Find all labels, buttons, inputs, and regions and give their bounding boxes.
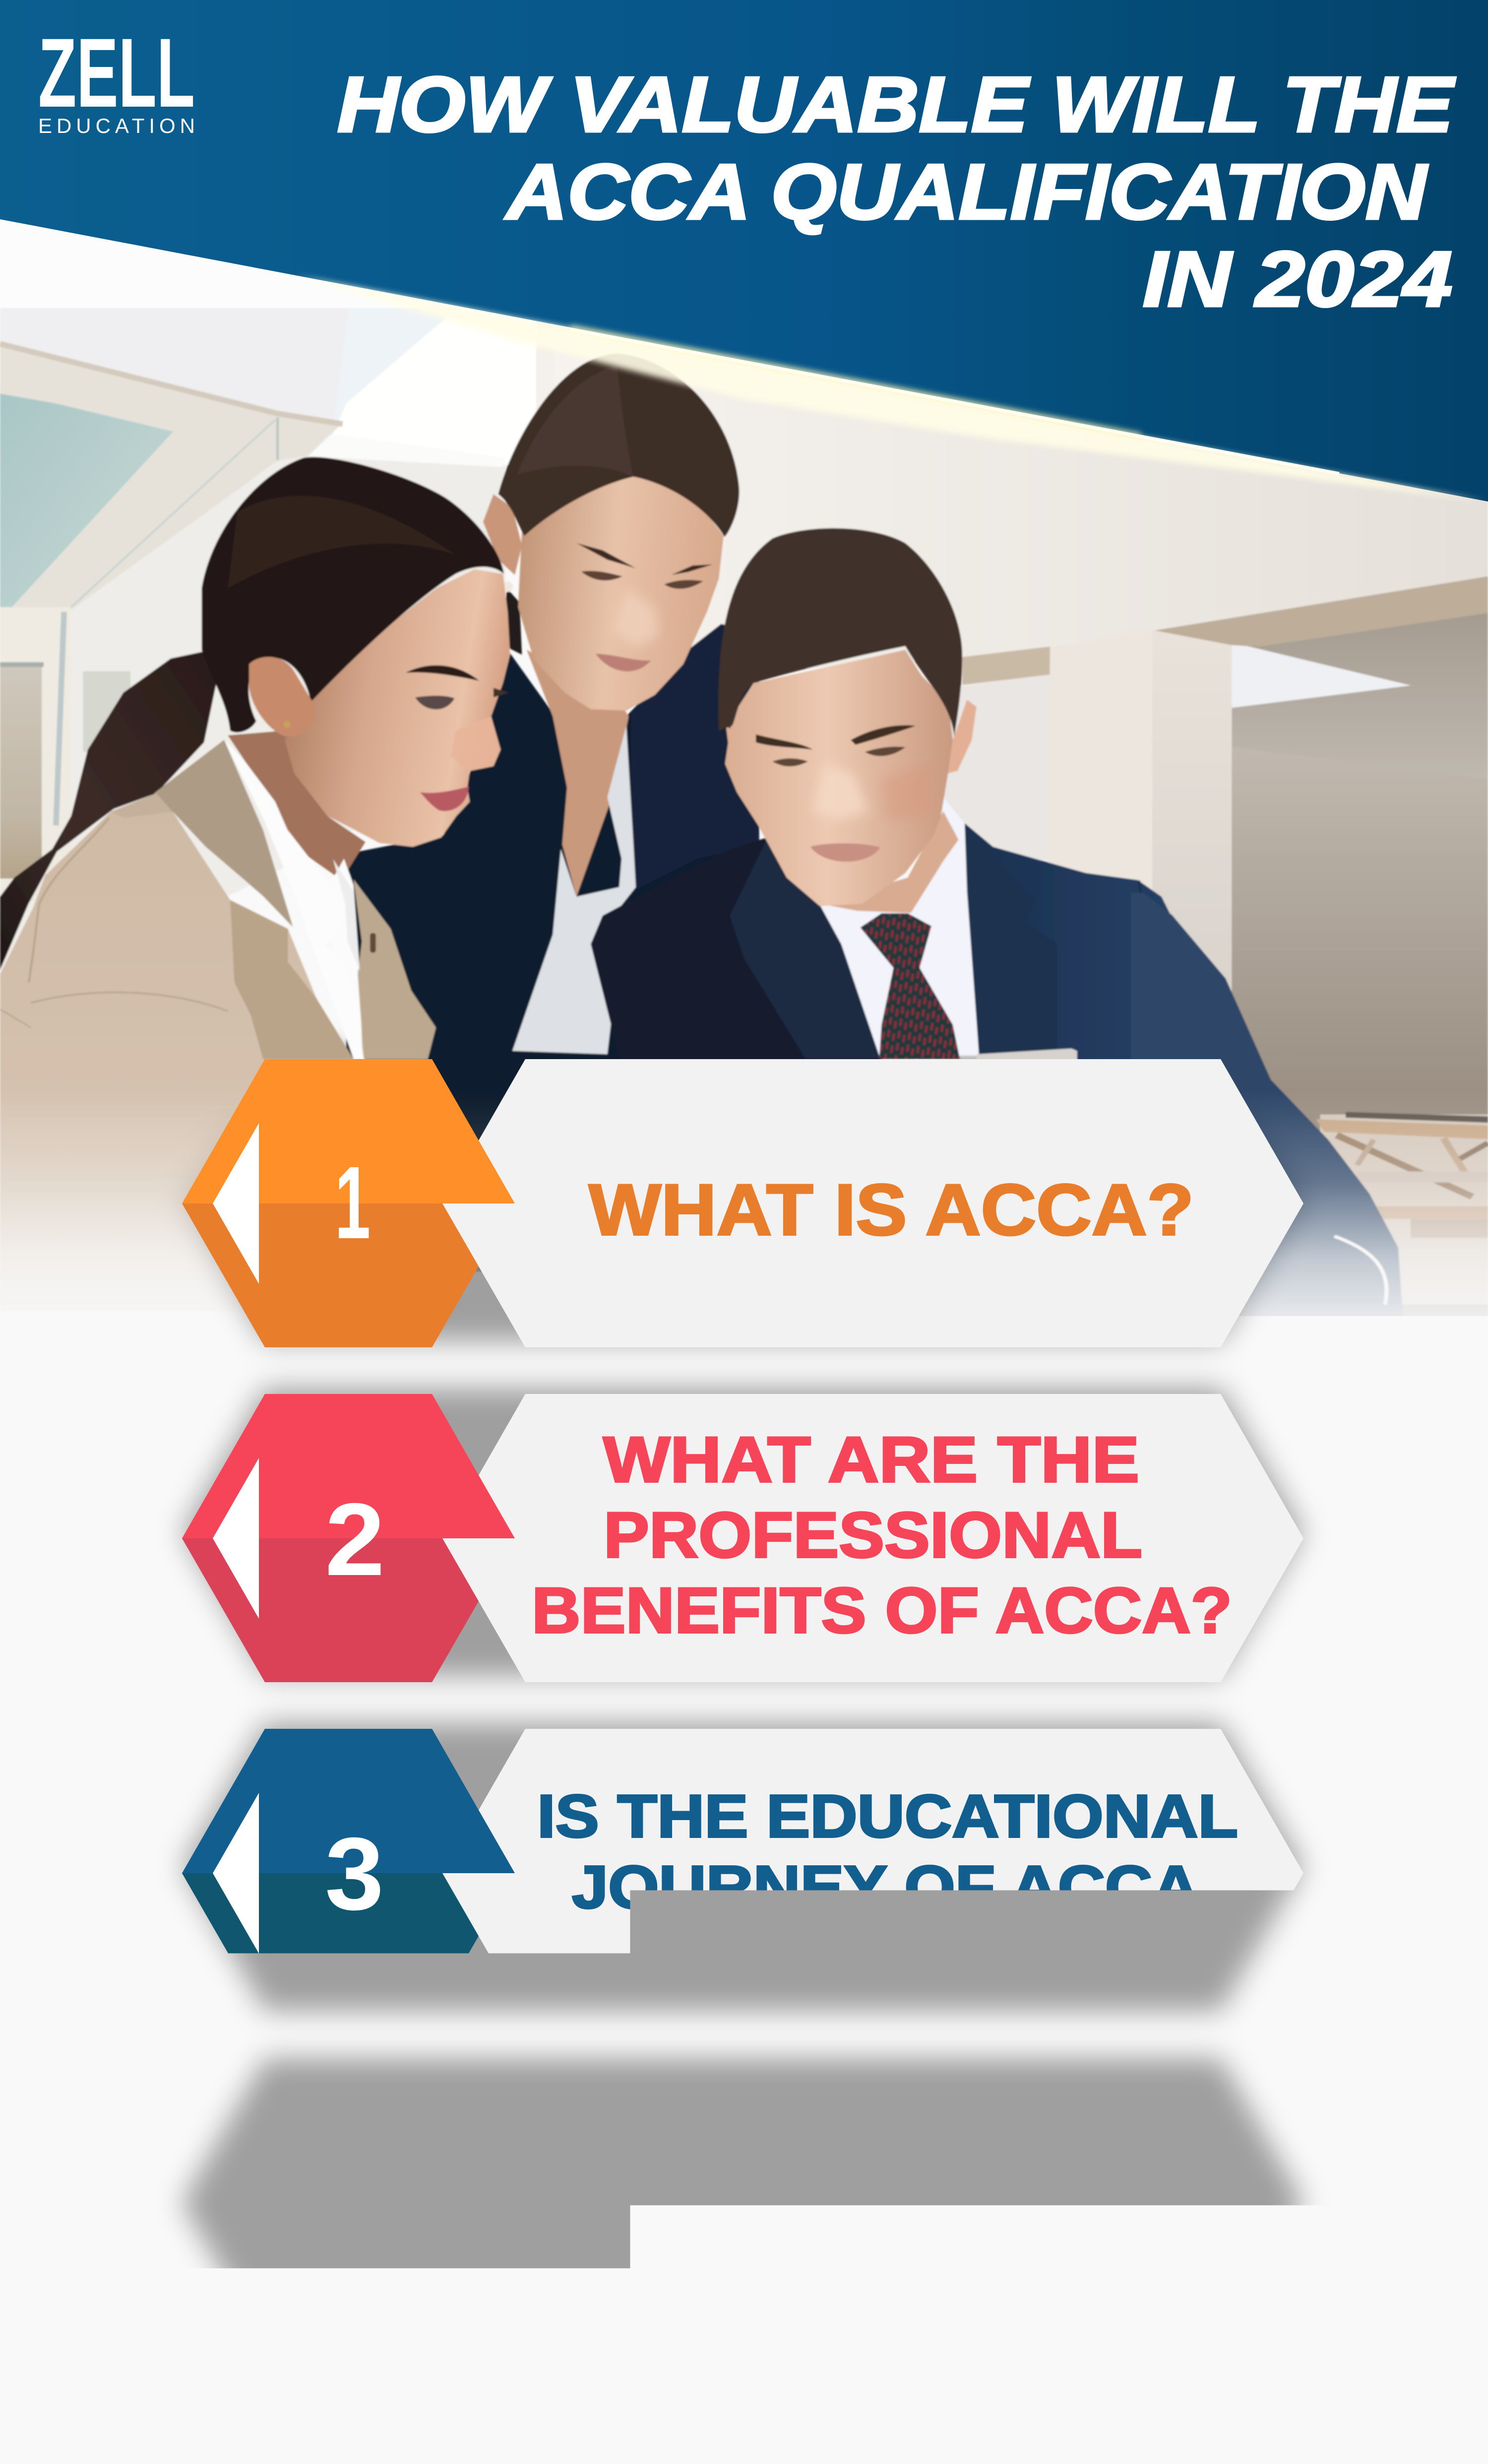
tie: [860, 913, 960, 1059]
hexagon upper half: [182, 1729, 515, 1873]
man's right arm: [1131, 893, 1403, 1317]
building background left: [0, 308, 759, 987]
white arrow: [213, 1123, 259, 1284]
hair: [202, 457, 504, 732]
suit lapel: [965, 825, 1057, 1067]
hexagon lower half: [182, 2209, 515, 2352]
row 1: what is ACCA: [182, 1059, 1303, 1347]
label panel: [442, 2064, 1303, 2352]
hexagon upper half: [182, 1394, 515, 1538]
label: [532, 1423, 1232, 1646]
blazer: [346, 624, 759, 1271]
logo: Zell Education: EDUCATION: [38, 114, 195, 137]
brows, eyes, nose, lips: [756, 734, 813, 750]
title: ACCA QUALIFICATION: [504, 148, 1428, 236]
label panel: [442, 1394, 1303, 1682]
earring: [502, 581, 513, 592]
number: 2: [325, 1482, 385, 1597]
coat collar: [154, 740, 293, 927]
label: IS THE EDUCATIONAL: [537, 1782, 1238, 1850]
hexagon upper half: [182, 1059, 515, 1203]
neck: [228, 731, 366, 880]
label panel: [442, 1729, 1303, 2017]
earring: [284, 721, 290, 728]
white shirt: [512, 726, 636, 1054]
logo: Zell Education: [38, 18, 195, 137]
photo: three colleagues looking at a tablet: [0, 280, 1488, 1319]
title: [337, 61, 1456, 323]
row 4: costs and ROI: [182, 2064, 1303, 2352]
suit: [965, 823, 1290, 1271]
label: WHAT IS ACCA?: [589, 1169, 1194, 1250]
coat right chest: [354, 880, 436, 1059]
label: DIFFICULT?: [711, 1924, 1080, 1991]
white arrow: [213, 1458, 259, 1619]
label: [537, 1782, 1238, 1991]
white arrow: [213, 1793, 259, 1954]
row 2: professional benefits: [182, 1394, 1303, 1682]
table in background: [1316, 1112, 1488, 1304]
white strip beneath header: [0, 208, 1488, 516]
label: COSTS & RETURN ON: [547, 2110, 1209, 2178]
header banner: [0, 0, 1488, 502]
ponytail: [0, 650, 216, 970]
label: JOURNEY OF ACCA: [572, 1853, 1199, 1921]
trench coat: [0, 740, 436, 1312]
row drop shadows: [182, 1053, 1303, 2346]
front woman: [0, 457, 510, 1067]
glow along the header edge: [298, 276, 1488, 502]
hexagon lower half: [182, 1203, 515, 1347]
brow, eye, nose, lips: [406, 665, 479, 681]
shirt placket: [224, 740, 364, 1059]
face: [725, 650, 953, 906]
hexagon upper half: [182, 2064, 515, 2209]
white arrow: [213, 2128, 259, 2289]
ear: [249, 657, 315, 736]
label: BENEFITS OF ACCA?: [532, 1574, 1232, 1646]
label: [547, 2110, 1209, 2319]
title: HOW VALUABLE WILL THE: [337, 61, 1456, 148]
ear: [483, 494, 522, 575]
white collar: [225, 740, 366, 1067]
middle woman: [346, 353, 759, 1271]
hexagon lower half: [182, 1538, 515, 1682]
number: 3: [325, 1817, 384, 1932]
hair: [718, 528, 962, 736]
label: OF ACCA: [747, 2252, 1032, 2319]
hexagon lower half: [182, 1873, 515, 2017]
title: IN 2024: [1143, 236, 1452, 323]
ears: [948, 699, 977, 773]
neck: [820, 811, 958, 913]
coat torso shadow: [230, 900, 354, 1059]
label: WHAT ARE THE: [603, 1423, 1139, 1496]
face: [285, 569, 510, 847]
shirt and collar: [813, 797, 979, 1056]
number: 4: [322, 2152, 392, 2268]
brows, eyes, nose, lips: [576, 543, 636, 569]
row 3: educational journey: [182, 1729, 1303, 2017]
building background right: [554, 280, 1488, 1319]
neck and chest: [527, 650, 628, 896]
logo: Zell Education: ZELL: [38, 18, 195, 127]
label: INVESTMENT (ROI): [586, 2181, 1171, 2249]
number: 1: [335, 1145, 371, 1261]
man in suit: [591, 528, 1290, 1271]
label panel: [442, 1059, 1303, 1347]
hair: [498, 353, 739, 537]
sleeve fold: [31, 992, 228, 1011]
tablet: [977, 1049, 1077, 1082]
hair back: [503, 588, 522, 655]
face: [518, 477, 724, 710]
label: PROFESSIONAL: [604, 1499, 1142, 1571]
